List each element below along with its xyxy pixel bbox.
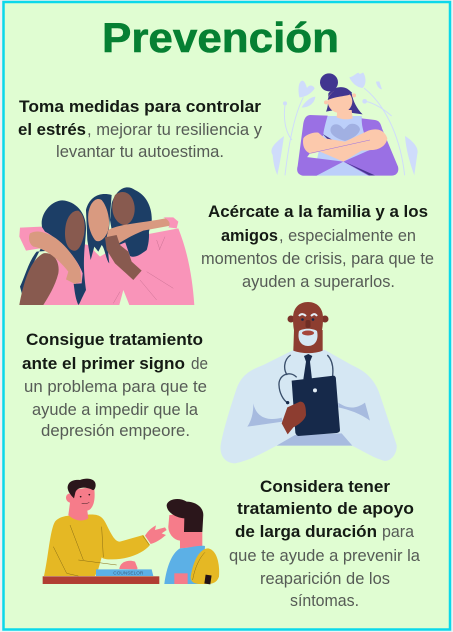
- text block: family and friends: , especialmente en: [279, 226, 416, 245]
- text block: family and friends: amigos: [221, 226, 278, 245]
- text block: long-term support: para: [382, 522, 415, 541]
- title: Prevención: [102, 14, 339, 61]
- text block: early treatment: [22, 330, 208, 440]
- text block: family and friends: [201, 202, 434, 291]
- icon: woman hugging herself: [271, 73, 418, 176]
- text block: stress: , mejorar tu resiliencia y: [87, 120, 262, 139]
- text block: family and friends: Acércate a la familia y a los: [208, 202, 428, 221]
- text block: family and friends: ayuden a superarlos.: [242, 272, 395, 291]
- text block: family and friends: momentos de crisis, para que te: [201, 249, 434, 268]
- text block: early treatment: Consigue tratamiento: [26, 330, 203, 349]
- text block: early treatment: ante el primer signo: [22, 354, 185, 373]
- text block: long-term support: Considera tener: [260, 477, 390, 496]
- text block: stress: levantar tu autoestima.: [56, 142, 224, 161]
- text block: long-term support: de larga duración: [235, 522, 377, 541]
- text block: early treatment: ayude a impedir que la: [32, 400, 199, 419]
- icon: doctor with tablet: [220, 330, 397, 463]
- icon: three hugging friends: [19, 187, 194, 305]
- text block: long-term support: síntomas.: [290, 591, 359, 610]
- icon: counselor and student: [43, 479, 219, 584]
- text block: long-term support: tratamiento de apoyo: [237, 499, 414, 518]
- text block: early treatment: un problema para que te: [24, 377, 207, 396]
- text block: stress: [18, 97, 262, 161]
- icon: counselor and student: COUNSELOR: [113, 571, 143, 576]
- text block: stress: Toma medidas para controlar: [19, 97, 261, 116]
- text block: long-term support: [229, 477, 421, 610]
- text block: long-term support: que te ayude a prevenir la: [229, 546, 421, 565]
- icon: doctor face: [288, 302, 328, 346]
- text block: early treatment: depresión empeore.: [41, 421, 190, 440]
- text block: early treatment: de: [191, 354, 208, 373]
- text block: long-term support: reaparición de los: [260, 569, 390, 588]
- text block: stress: el estrés: [18, 120, 86, 139]
